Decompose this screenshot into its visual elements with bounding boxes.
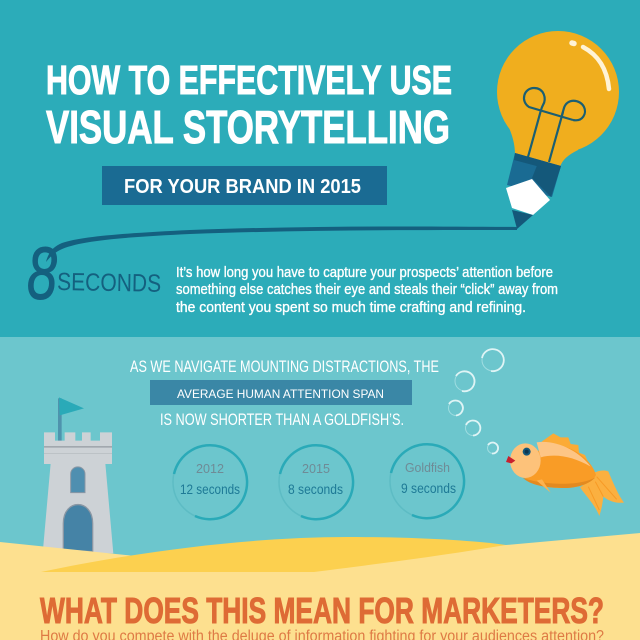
title: HOW TO EFFECTIVELY USE xyxy=(46,57,452,103)
panel: top teal background xyxy=(0,0,640,337)
pencil tip xyxy=(512,210,533,229)
tail xyxy=(580,470,624,516)
intro paragraph xyxy=(176,265,558,316)
panel: water background xyxy=(0,337,640,640)
body xyxy=(520,446,596,488)
highlight banner xyxy=(150,380,412,405)
stat circle: goldfish: 9 seconds xyxy=(401,481,456,496)
subtitle banner: FOR YOUR BRAND IN 2015 xyxy=(124,176,361,198)
stat circle: goldfish xyxy=(390,444,464,518)
title: VISUAL STORYTELLING xyxy=(46,101,450,153)
window xyxy=(71,467,85,493)
stat circle: 2015: 8 seconds xyxy=(288,482,343,497)
back highlight xyxy=(537,442,591,467)
eye xyxy=(523,448,531,456)
flag pole xyxy=(58,398,62,442)
dorsal fin xyxy=(542,433,590,467)
icon: bubbles xyxy=(448,349,504,454)
tower body xyxy=(43,463,113,553)
head xyxy=(510,443,541,478)
tail lines xyxy=(588,477,617,510)
pencil ink line xyxy=(46,226,517,262)
title xyxy=(46,57,452,153)
stat circle: 2015: 2015 xyxy=(302,461,330,476)
pectoral fin xyxy=(537,479,551,493)
lips xyxy=(506,456,515,463)
numeral 8: 8 xyxy=(27,232,57,315)
stat circle: 2015 xyxy=(279,445,353,519)
icon: light bulb pencil xyxy=(497,31,619,229)
handwritten 8 seconds xyxy=(27,232,161,315)
belly shadow xyxy=(523,477,595,488)
door xyxy=(63,505,93,552)
stat circle: 2012: 12 seconds xyxy=(180,482,240,497)
icon: goldfish xyxy=(506,433,624,516)
stat circle: 2012: 2012 xyxy=(196,461,224,476)
intro paragraph: It’s how long you have to capture your prospects’ attention before xyxy=(176,265,553,281)
icon: castle tower xyxy=(43,397,113,553)
pencil body xyxy=(507,153,561,197)
intro paragraph: the content you spent so much time crafting and refining. xyxy=(176,300,526,316)
word seconds: SECONDS xyxy=(57,268,161,298)
flag xyxy=(59,397,84,415)
attention span statement xyxy=(130,358,439,429)
stat circle: 2012 xyxy=(173,445,247,519)
attention span statement: IS NOW SHORTER THAN A GOLDFISH’S. xyxy=(160,411,404,429)
intro paragraph: something else catches their eye and steals their “click” away from xyxy=(176,282,558,298)
attention span statement: AS WE NAVIGATE MOUNTING DISTRACTIONS, THE xyxy=(130,358,439,376)
bulb filament xyxy=(524,88,585,162)
pencil white band xyxy=(506,179,550,215)
stat circle: goldfish: Goldfish xyxy=(405,460,450,475)
parapet lines xyxy=(44,446,112,448)
sand foreground xyxy=(0,533,640,640)
bulb highlight xyxy=(572,43,609,89)
attention span statement: AVERAGE HUMAN ATTENTION SPAN xyxy=(177,387,384,401)
bulb glass xyxy=(497,31,619,167)
sand dune xyxy=(41,537,506,572)
subtitle banner xyxy=(102,166,387,205)
